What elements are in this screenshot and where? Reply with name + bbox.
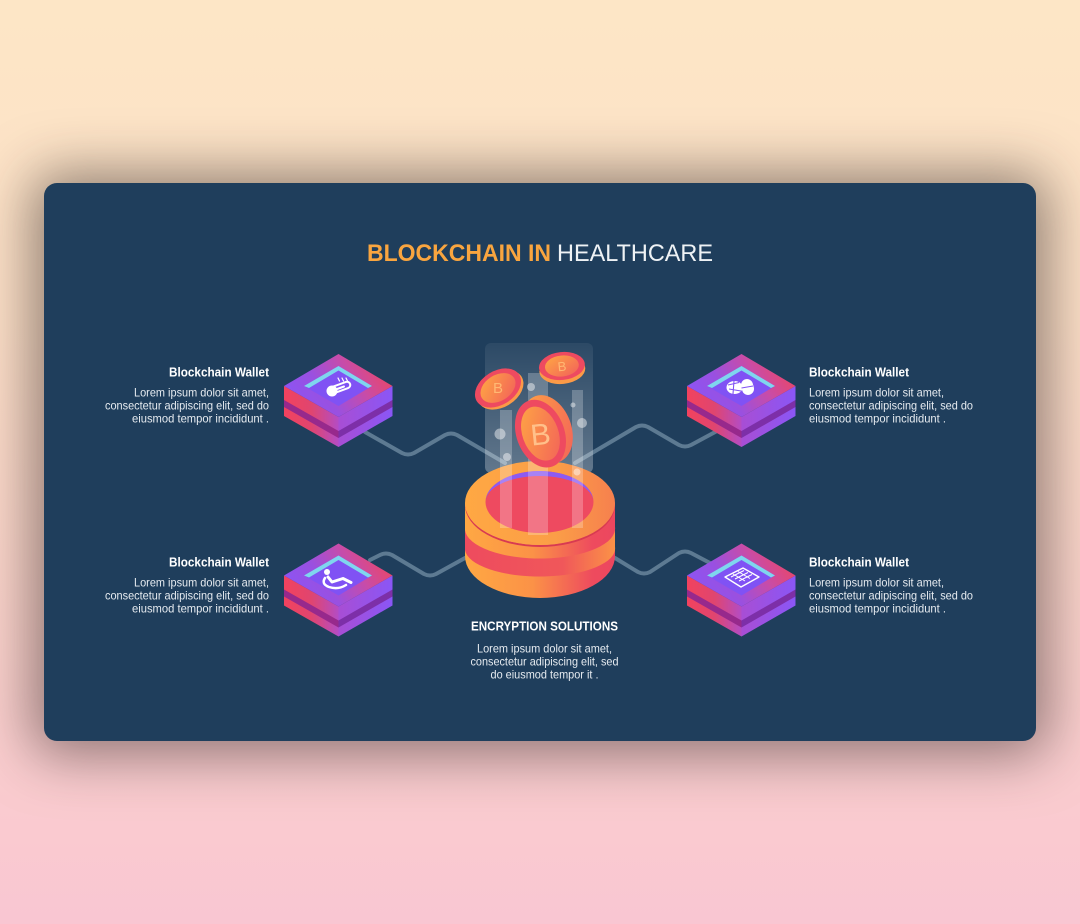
text: top-right body: consectetur adipiscing elit, sed do [809,398,973,412]
title [367,240,713,267]
floating particles [494,383,587,476]
text: encryption solutions body: consectetur adipiscing elit, sed [470,654,618,668]
text: top-left body: eiusmod tempor incididunt . [132,412,269,426]
text: bottom-right body [809,576,973,616]
cylinder base [465,461,615,598]
text: encryption solutions body: do eiusmod tempor it . [490,668,598,682]
panel: bottom-left item [105,544,392,636]
text: encryption solutions heading: ENCRYPTION SOLUTIONS [471,620,618,634]
text: top-left body: consectetur adipiscing elit, sed do [105,398,269,412]
text: bottom-right body: Lorem ipsum dolor sit amet, [809,576,944,590]
text: top-right body: Lorem ipsum dolor sit amet, [809,386,944,400]
title: HEALTHCARE [557,240,713,267]
text: bottom-left body: Lorem ipsum dolor sit amet, [134,576,269,590]
text: top-right heading: Blockchain Wallet [809,366,910,380]
text: bottom-right heading: Blockchain Wallet [809,556,910,570]
coin: top-left [468,360,531,418]
text: top-left body [105,386,269,426]
text: encryption solutions body [470,642,618,682]
icon block: pills [687,354,796,447]
icon: thermometer [326,378,348,396]
icon: wheelchair [324,569,351,588]
coin: top-left: B [493,380,503,397]
text: bottom-left body [105,576,269,616]
panel: top-right item [687,354,973,447]
coin: centre: B [529,418,552,453]
text: bottom-right body: consectetur adipiscing elit, sed do [809,588,973,602]
text: bottom-left body: eiusmod tempor incididunt . [132,602,269,616]
coin: top-right [538,350,587,386]
text: bottom-left heading: Blockchain Wallet [169,556,270,570]
title: BLOCKCHAIN IN [367,240,551,267]
panel: top-left item [105,354,392,447]
connector lines [365,426,717,576]
light beam backdrop [485,343,593,473]
coin: top-right: B [557,359,567,374]
icon block: wheelchair [284,544,392,636]
icon: pills [726,378,755,396]
text: bottom-right body: eiusmod tempor incididunt . [809,602,946,616]
text: top-right body [809,386,973,426]
coin: centre [505,388,583,475]
text: top-left heading: Blockchain Wallet [169,366,270,380]
icon block: thermometer [284,354,392,447]
text: encryption solutions body: Lorem ipsum dolor sit amet, [477,642,612,656]
light beams [500,373,583,535]
text: top-left body: Lorem ipsum dolor sit amet, [134,386,269,400]
icon block: document [687,544,796,636]
panel: dark card [44,183,1036,741]
icon: document [725,568,759,587]
panel: bottom-right item [687,544,973,636]
central illustration: cylinder with coins [465,343,615,598]
text: bottom-left body: consectetur adipiscing elit, sed do [105,588,269,602]
text: top-right body: eiusmod tempor incididunt . [809,412,946,426]
